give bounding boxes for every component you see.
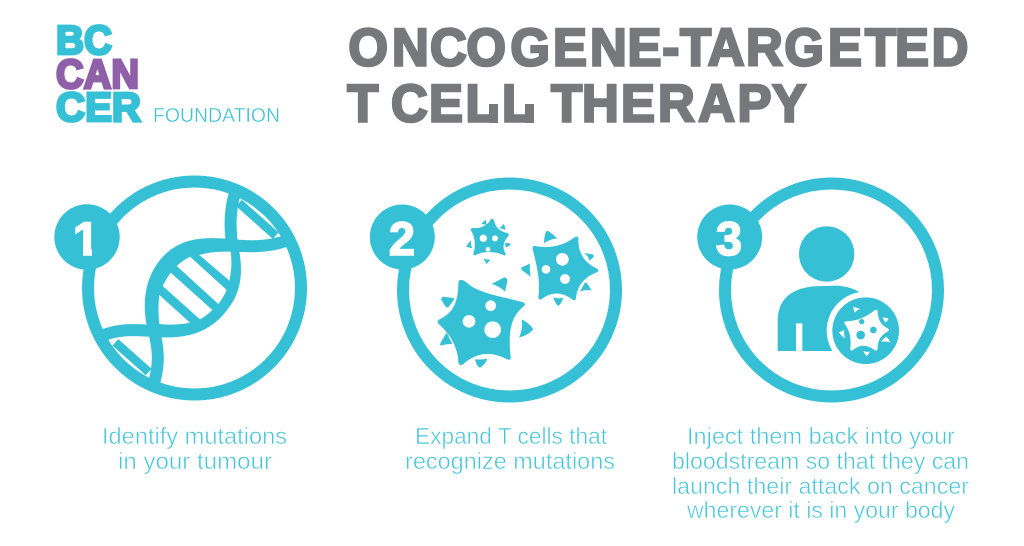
caption 2 [405,423,615,474]
caption 3: launch their attack on cancer [672,473,969,499]
icon: DNA helix [102,193,286,383]
caption 3: bloodstream so that they can [672,448,969,474]
badge 1: 1 [73,212,99,265]
badge 2 [370,204,435,270]
logo: BC Cancer Foundation: CAN [56,51,139,97]
ring 1 [88,182,301,394]
panel: step 1 identify mutations [54,182,301,474]
caption 3: Inject them back into your [687,423,955,449]
badge 3 [697,204,762,270]
large cell [438,277,533,368]
ring 3 [725,184,938,396]
logo: BC Cancer Foundation: FOUNDATION [153,104,280,127]
badge 3: 3 [716,212,742,265]
T cell badge [827,292,905,370]
caption 2: recognize mutations [405,448,615,474]
title [347,19,968,134]
person [778,226,863,351]
title: T CELL THERAPY [347,75,806,134]
ring 2 [403,184,616,396]
caption 3: wherever it is in your body [686,497,955,523]
medium cell [521,231,598,306]
title: ONCOGENE-TARGETED [348,19,968,78]
caption 1: in your tumour [118,448,272,474]
icon: person with T cell [778,226,905,370]
icon: expanding T cells [438,219,598,368]
caption 3 [672,423,969,523]
caption 1: Identify mutations [102,423,287,449]
badge 2: 2 [389,212,415,265]
badge 1 [54,204,120,270]
small cell [466,219,511,264]
panel: step 2 expand T cells [370,184,616,474]
logo: BC Cancer Foundation: BC [56,17,112,63]
panel: step 3 inject back [672,184,969,523]
caption 1 [102,423,287,474]
logo: BC Cancer Foundation [56,17,280,130]
logo: BC Cancer Foundation: CER [56,84,141,130]
caption 2: Expand T cells that [415,423,608,449]
